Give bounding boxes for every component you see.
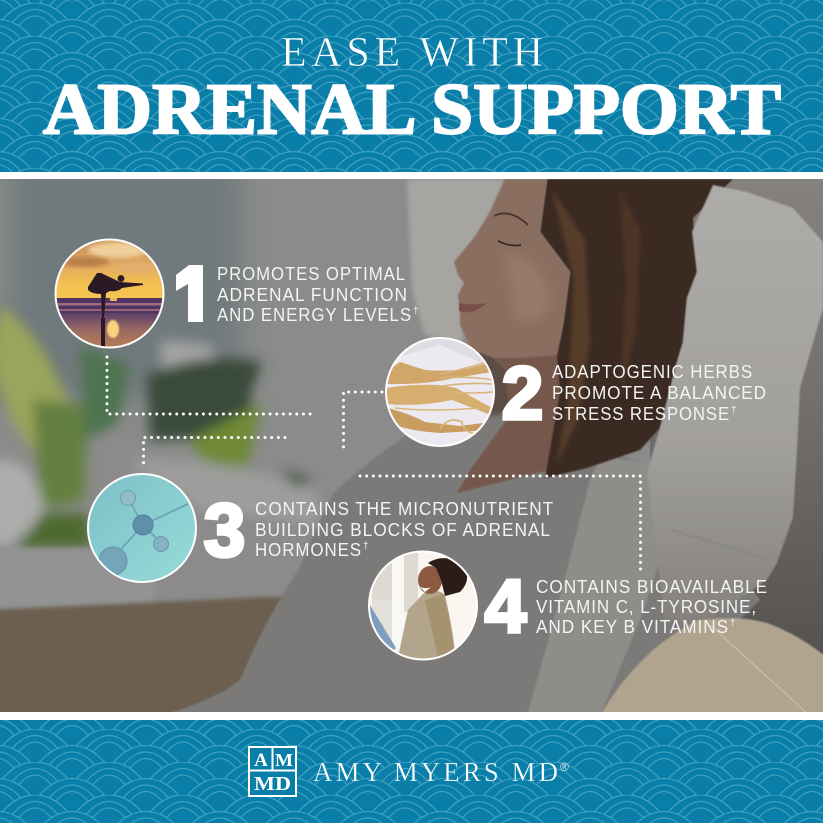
top banner — [0, 0, 823, 172]
item 2 — [385, 337, 767, 447]
text: promotes optimal adrenal function: ADRENAL FUNCTION — [217, 284, 408, 305]
hair — [540, 179, 733, 478]
shirt panel — [527, 457, 660, 716]
title: ease with: EASE WITH — [281, 30, 543, 76]
bottom banner — [0, 720, 823, 823]
background photo: relaxing woman — [0, 160, 823, 722]
brand name: AMY MYERS MD — [313, 757, 558, 787]
text: adaptogenic herbs: ADAPTOGENIC HERBS — [552, 361, 753, 382]
text: adaptogenic herbs: PROMOTE A BALANCED — [552, 382, 767, 403]
photo circle: yoga at sunset — [54, 238, 164, 348]
blurred pot — [0, 546, 97, 562]
text: adaptogenic herbs: † — [731, 405, 737, 416]
dotted connector 3 — [144, 438, 285, 465]
blurred table — [0, 597, 290, 722]
blurred plant — [0, 305, 320, 548]
text: promotes optimal adrenal function: † — [413, 306, 419, 317]
text: bioavailable vitamins: CONTAINS BIOAVAILABLE — [536, 576, 768, 597]
text: micronutrient building blocks: HORMONES — [255, 539, 362, 560]
pillow behind head — [407, 179, 505, 345]
text: promotes optimal adrenal function — [217, 263, 419, 325]
text: adaptogenic herbs: STRESS RESPONSE — [552, 403, 730, 424]
text: micronutrient building blocks: CONTAINS THE MICRONUTRIENT — [255, 498, 554, 519]
number 3: 3 — [204, 488, 245, 572]
text: bioavailable vitamins: † — [730, 618, 736, 629]
photo circle: ginseng root — [385, 337, 495, 447]
title: adrenal support: ADRENAL SUPPORT — [43, 68, 781, 150]
number 2: 2 — [502, 351, 543, 435]
text: bioavailable vitamins: AND KEY B VITAMINS — [536, 616, 729, 637]
photo circle: happy woman — [368, 550, 478, 662]
shirt body — [160, 410, 760, 716]
sofa — [600, 618, 823, 716]
number 1: 1 — [171, 252, 213, 336]
logo mark: MD — [254, 773, 291, 795]
right sleeve — [647, 185, 823, 625]
text: micronutrient building blocks — [255, 498, 554, 560]
text: micronutrient building blocks: BUILDING BLOCKS OF ADRENAL — [255, 519, 551, 540]
item 4 — [368, 550, 768, 662]
text: bioavailable vitamins: VITAMIN C, L-TYROSINE, — [536, 596, 757, 617]
number 4: 4 — [485, 564, 527, 648]
right background — [650, 179, 823, 654]
registered mark: ® — [560, 760, 569, 774]
logo mark — [249, 747, 296, 796]
text: micronutrient building blocks: † — [363, 541, 369, 552]
text: promotes optimal adrenal function: AND ENERGY LEVELS — [217, 304, 412, 325]
text: promotes optimal adrenal function: PROMOTES OPTIMAL — [217, 263, 406, 284]
text: bioavailable vitamins — [536, 576, 768, 637]
face — [454, 179, 570, 358]
photo circle: molecule — [87, 473, 197, 583]
neck — [457, 340, 560, 494]
logo mark: A — [254, 750, 268, 771]
text: adaptogenic herbs — [552, 361, 767, 424]
dotted connector 1 to 2 — [107, 357, 315, 414]
item 3 — [87, 473, 554, 583]
dotted connector 4 — [360, 476, 640, 572]
dotted connector 2 to 3 — [344, 392, 382, 452]
shadow under chin — [466, 344, 510, 418]
white divider bars — [0, 172, 823, 720]
item 1 — [50, 235, 419, 352]
logo mark: M — [275, 750, 293, 770]
